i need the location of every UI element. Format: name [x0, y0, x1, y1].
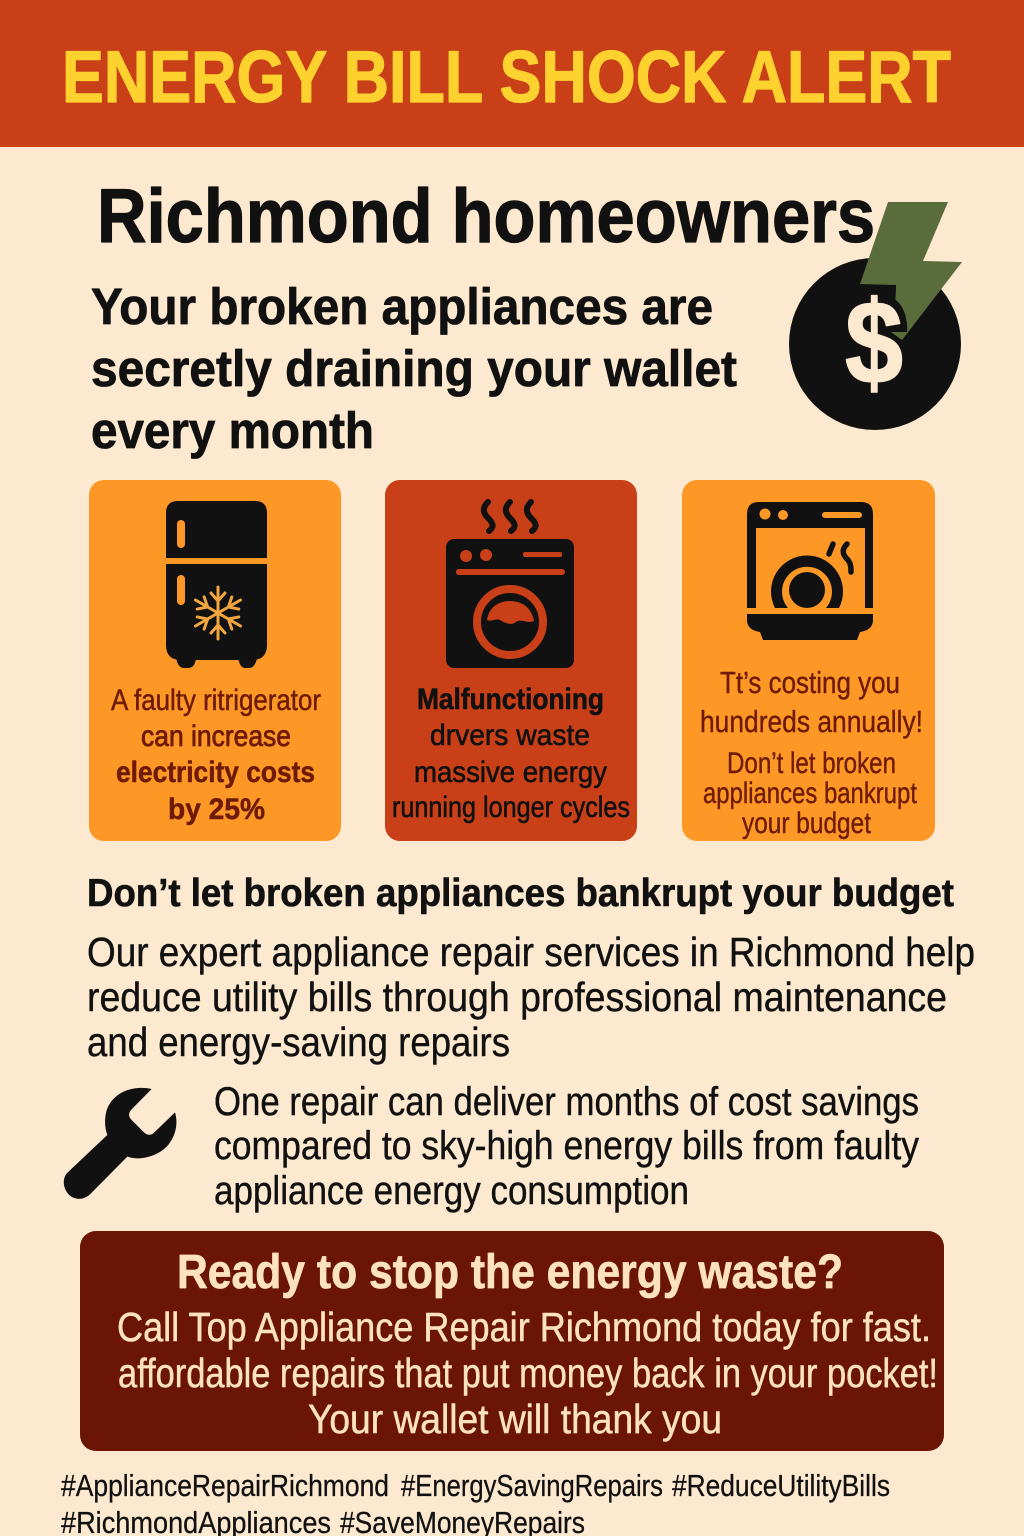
panel: costing hundreds annually	[682, 480, 935, 841]
card text: dryers: Malfunctioning	[417, 683, 604, 716]
callout heading: Ready to stop the energy waste?	[177, 1246, 843, 1299]
card text: dryers: massive energy	[414, 756, 607, 789]
heading: don't let broken appliances: Don’t let broken appliances bankrupt your budget	[87, 872, 954, 915]
card text: costing hundreds: Tt’s costing you	[720, 665, 900, 700]
hashtags: #EnergySavingRepairs	[401, 1468, 663, 1503]
subtitle: Richmond homeowners: Richmond homeowners	[97, 174, 875, 259]
card text: dryers: drvers waste	[430, 719, 590, 752]
card text: costing hundreds: Don’t let broken	[727, 747, 896, 780]
text block: expert repair services: and energy-saving repairs	[87, 1019, 510, 1065]
callout text: Your wallet will thank you	[308, 1396, 722, 1442]
heading: broken appliances draining wallet: secretly draining your wallet	[91, 340, 737, 397]
text block: expert repair services: reduce utility bills through professional maintenance	[87, 974, 947, 1020]
text block: one repair savings: One repair can deliver months of cost savings	[214, 1080, 919, 1124]
icon: dollar coin with lightning bolt: $	[845, 277, 903, 409]
panel: malfunctioning dryers	[385, 480, 637, 841]
panel: faulty refrigerator	[89, 480, 341, 841]
card text: refrigerator: can increase	[141, 720, 291, 753]
card text: dryers: running longer cycles	[392, 791, 630, 824]
hashtags: #ReduceUtilityBills	[672, 1468, 890, 1503]
card text: refrigerator: A faulty ritrigerator	[111, 684, 321, 717]
header banner	[0, 0, 1024, 147]
heading: broken appliances draining wallet: every month	[91, 402, 374, 459]
text block: expert repair services	[87, 929, 975, 1065]
heading: broken appliances draining wallet	[91, 278, 737, 459]
icon: dryer with steam	[446, 502, 574, 668]
callout text	[117, 1304, 938, 1442]
icon: dollar coin with lightning bolt	[789, 202, 962, 430]
icon: dishwasher	[747, 502, 873, 640]
icon: wrench	[64, 1088, 176, 1199]
hashtags: #ApplianceRepairRichmond	[61, 1468, 389, 1503]
card text: costing hundreds: your budget	[742, 807, 872, 840]
card text: dryers	[392, 683, 630, 824]
text block: one repair savings: appliance energy consumption	[214, 1169, 689, 1213]
card text: refrigerator: electricity costs	[116, 756, 315, 789]
card text: costing hundreds: hundreds annually!	[700, 704, 923, 739]
card text: refrigerator	[111, 684, 321, 826]
card text: costing hundreds	[700, 665, 923, 840]
hashtags	[61, 1468, 890, 1536]
text block: one repair savings: compared to sky-high energy bills from faulty	[214, 1124, 919, 1168]
card text: refrigerator: by 25%	[168, 793, 265, 826]
callout text: Call Top Appliance Repair Richmond today for fast.	[117, 1304, 931, 1350]
card text: costing hundreds: appliances bankrupt	[703, 777, 918, 810]
text block: one repair savings	[214, 1080, 919, 1213]
icon: refrigerator	[166, 501, 267, 668]
callout: call to action	[80, 1231, 944, 1451]
heading: broken appliances draining wallet: Your broken appliances are	[91, 278, 713, 335]
